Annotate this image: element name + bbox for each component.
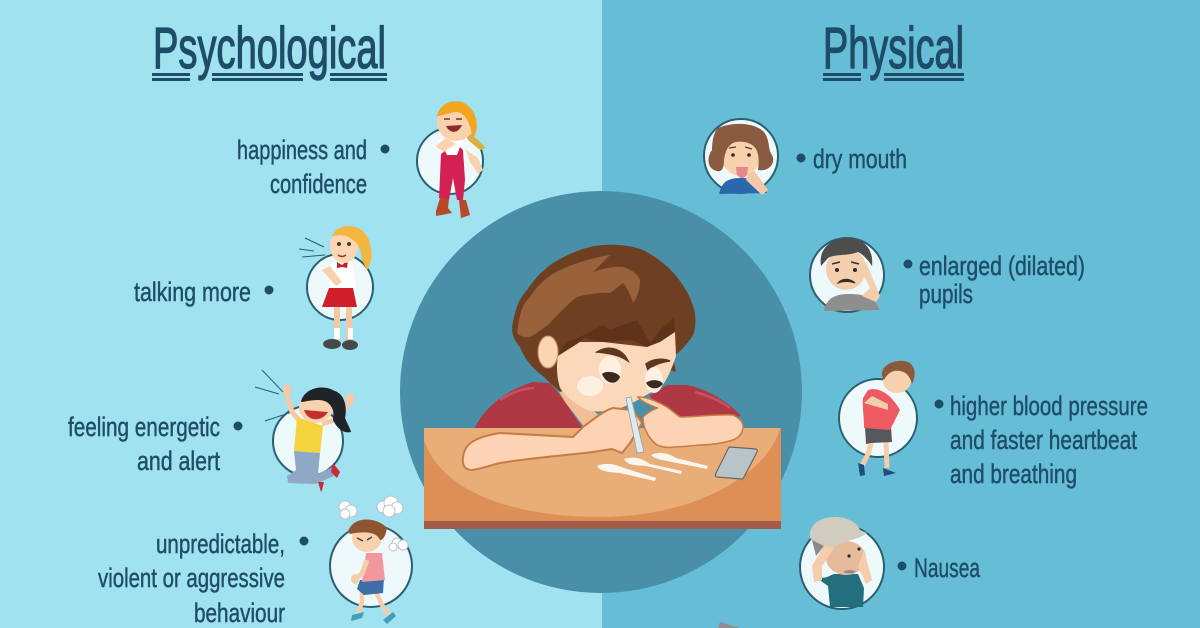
ear: [538, 336, 558, 368]
table: [424, 428, 781, 528]
icon: talking girl: [299, 226, 373, 350]
heading: Psychological: [152, 16, 387, 81]
icon: woman with dry mouth: [704, 119, 778, 195]
icon: angry boy with steam: [330, 496, 412, 624]
fringe shadow: [558, 318, 675, 355]
panel: physical background: [602, 0, 1200, 628]
text: happiness and confidence: confidence: [270, 169, 367, 199]
icon: happy girl: [417, 101, 486, 218]
cheek: [577, 376, 603, 396]
phone: [715, 447, 757, 479]
table top light: [424, 428, 780, 517]
text: Nausea: Nausea: [914, 553, 981, 583]
icon: man with dilated pupils: [810, 238, 884, 312]
text: unpredictable, violent or aggressive behaviour: [98, 529, 308, 628]
text: Nausea: [898, 553, 981, 583]
text: unpredictable, violent or aggressive behaviour: violent or aggressive: [98, 563, 285, 593]
central illustration: boy and table: [424, 245, 781, 529]
arm right: [638, 397, 743, 447]
text: dry mouth: [796, 144, 907, 174]
icon: boy holding chest: [839, 361, 917, 476]
text: unpredictable, violent or aggressive behaviour: behaviour: [194, 598, 285, 628]
heading: Physical: Physical: [823, 16, 964, 81]
text: feeling energetic and alert: and alert: [137, 446, 220, 476]
eyebrows: [597, 348, 670, 370]
powder lines: [597, 453, 708, 481]
table edge: [424, 521, 781, 529]
text: feeling energetic and alert: feeling energetic: [68, 412, 220, 442]
icon: old man with cap: [800, 517, 884, 609]
text: enlarged (dilated) pupils: enlarged (dilated): [919, 251, 1085, 281]
text: unpredictable, violent or aggressive behaviour: unpredictable,: [156, 529, 285, 559]
panel: psychological background: [0, 0, 602, 628]
text: dry mouth: dry mouth: [813, 144, 907, 174]
text: higher blood pressure and faster heartbeat and breathing: and breathing: [950, 459, 1077, 489]
heading: Psychological: Psychological: [153, 16, 386, 81]
text: happiness and confidence: happiness and: [237, 135, 367, 165]
straw: [626, 397, 644, 453]
eyes: [599, 356, 621, 384]
text: enlarged (dilated) pupils: pupils: [919, 279, 973, 309]
text: feeling energetic and alert: [68, 412, 242, 476]
icon: energetic girl: [255, 370, 354, 492]
neck: [555, 385, 605, 428]
icon: partial next character: [718, 622, 740, 628]
text: higher blood pressure and faster heartbeat and breathing: [934, 391, 1148, 489]
heading: Physical: [823, 16, 964, 81]
text: enlarged (dilated) pupils: [904, 251, 1085, 309]
arm left: [463, 408, 642, 470]
shirt: [474, 382, 741, 436]
face: [557, 332, 676, 412]
text: happiness and confidence: [237, 135, 390, 199]
hair highlight: [517, 255, 640, 337]
hair: [512, 245, 695, 392]
text: higher blood pressure and faster heartbeat and breathing: and faster heartbeat: [950, 425, 1137, 455]
text: talking more: talking more: [134, 277, 251, 307]
central circle: [400, 191, 802, 593]
